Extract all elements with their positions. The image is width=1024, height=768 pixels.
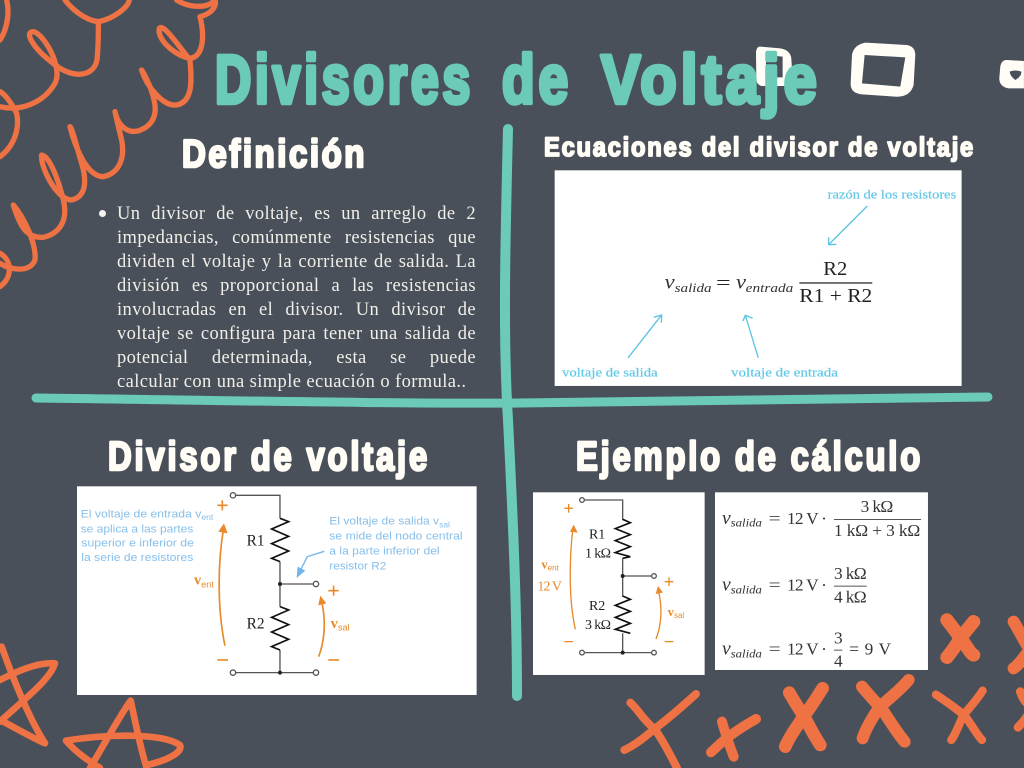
divider: vertical teal line [505, 129, 517, 696]
labels: R2 3kΩ [585, 599, 611, 633]
equation line 1: 3 kΩ [861, 497, 893, 516]
equation line 1: 1 kΩ + 3 kΩ [834, 521, 920, 540]
equation line 3: = [769, 640, 781, 659]
text block: definition: Un divisor de voltaje, es un arreglo de 2 [117, 204, 476, 224]
text block: definition: dividen el voltaje y la corriente de salida. La [117, 252, 476, 272]
label: v sal: sal [674, 611, 684, 620]
text block: definition: involucradas en el divisor. Un divisor de [117, 300, 476, 320]
divider: horizontal teal line [36, 397, 988, 403]
label: v ent 12 V: v [541, 558, 548, 572]
equation line 1: 12 V · [787, 509, 827, 528]
panel: voltage divider equation [555, 170, 962, 386]
icon: white rounded frames top right [756, 43, 1024, 97]
text block: definition [117, 204, 476, 392]
equation line 1: v [722, 508, 731, 529]
panel: example circuit [533, 492, 705, 675]
equation line 2: 4 kΩ [834, 588, 867, 607]
title [215, 41, 821, 118]
label: voltaje de salida: voltaje de salida [562, 365, 658, 379]
text block: definition: división es proporcional a las resistencias [117, 276, 476, 296]
output voltage arrow [318, 586, 339, 660]
output voltage arrow [656, 577, 673, 642]
note: output voltage: resistor R2 [329, 560, 386, 572]
note: input voltage: la serie de resistores [81, 552, 194, 564]
equation: salida [675, 281, 712, 295]
heading: Ejemplo de cálculo: Ejemplo de cálculo [576, 433, 923, 479]
label: v ent 12 V [537, 558, 562, 595]
title: Divisores [215, 41, 474, 118]
equation line 2: 3 kΩ [834, 564, 867, 583]
input voltage arrow [217, 500, 228, 660]
labels: R2 3kΩ: R2 [589, 599, 605, 614]
heading: Divisor de voltaje: Divisor de voltaje [108, 433, 430, 479]
note: output voltage: se mide del nodo central [329, 531, 463, 543]
equation line 3 [722, 628, 891, 671]
heading: Ecuaciones del divisor de voltaje: Ecuaciones del divisor de voltaje [544, 132, 975, 162]
input voltage arrow [564, 504, 578, 642]
label: v ent: ent [201, 579, 214, 589]
labels: R1 1kΩ: 1 kΩ [585, 547, 611, 562]
label: razón de los resistores: razón de los resistores [828, 187, 956, 201]
heading: Definición: Definición [182, 133, 367, 176]
equation line 2 [722, 564, 867, 607]
arrow: to input voltage [743, 315, 758, 358]
label: R1: R1 [247, 532, 265, 549]
label: v ent 12 V: 12 V [537, 580, 562, 595]
equation line 1 [722, 497, 921, 540]
text block: definition: impedancias, comúnmente resistencias que [117, 228, 476, 248]
note: input voltage: El voltaje de entrada v [81, 508, 193, 520]
note: input voltage: superior e inferior de [81, 537, 194, 549]
equation: v [665, 272, 675, 294]
equation [665, 258, 872, 307]
equation: entrada [746, 281, 793, 295]
bullet [99, 210, 106, 217]
equation line 2: salida [731, 583, 762, 596]
decoration: orange curls top left [0, 0, 215, 287]
equation line 3: = 9 V [849, 640, 891, 659]
equation line 3: salida [731, 647, 762, 660]
label: R2: R2 [247, 615, 265, 632]
title: Voltaje [601, 41, 821, 118]
equation line 3: 12 V · [787, 640, 827, 659]
equation line 2: v [722, 575, 731, 596]
equation line 1: salida [731, 517, 762, 530]
label: v sal: v [331, 616, 338, 632]
note: input voltage: se aplica a las partes [81, 523, 194, 535]
arrow: to central node [299, 551, 324, 574]
arrow: to ratio [829, 206, 867, 245]
note: output voltage: a la parte inferior del [329, 545, 440, 557]
circuit wires and resistors [230, 493, 319, 675]
label: v sal: sal [338, 623, 349, 633]
equation: = [716, 272, 731, 294]
equation line 1: = [769, 509, 781, 528]
equation line 3: 3 [834, 628, 843, 647]
decoration: orange crosses bottom right [624, 620, 1024, 768]
text block: definition: voltaje se configura para tener una salida de [117, 324, 476, 344]
label: v ent 12 V: ent [548, 564, 560, 573]
labels: R1 1kΩ: R1 [589, 527, 605, 542]
label: voltaje de entrada: voltaje de entrada [731, 365, 838, 379]
panel: example calculation [715, 492, 928, 671]
arrow: to output voltage [628, 315, 662, 358]
note: output voltage [329, 516, 463, 572]
labels: R2 3kΩ: 3 kΩ [585, 618, 611, 633]
text block: definition: potencial determinada, esta se puede [117, 348, 476, 368]
note: input voltage: ent [201, 513, 214, 522]
note: output voltage: sal [439, 520, 450, 529]
note: input voltage [81, 508, 214, 564]
equation line 3: 4 [834, 652, 843, 671]
label: v sal: v [668, 605, 674, 619]
equation: R2 [823, 258, 847, 280]
panel: divider circuit [77, 486, 477, 695]
label: v ent: v [194, 573, 201, 589]
text block: definition: calcular con una simple ecuación o formula.. [117, 372, 466, 392]
title: de [502, 41, 572, 118]
equation line 2: = [769, 576, 781, 595]
note: output voltage: El voltaje de salida v [329, 516, 433, 528]
equation line 3: v [722, 639, 731, 660]
equation: R1 + R2 [799, 285, 872, 307]
equation line 2: 12 V · [787, 576, 827, 595]
example circuit wires and resistors [580, 498, 656, 655]
labels: R1 1kΩ [585, 527, 611, 562]
equation: v [736, 272, 746, 294]
decoration: orange stars bottom left [0, 647, 180, 768]
